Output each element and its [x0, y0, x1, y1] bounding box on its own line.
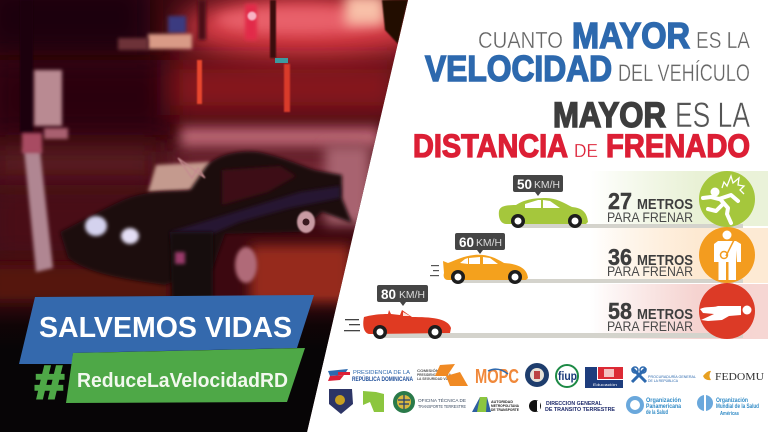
- icon: person lying down: [699, 283, 755, 339]
- row: 50 km/h: [499, 171, 768, 228]
- headline: velocity: [425, 15, 751, 89]
- car: orange: [443, 255, 528, 284]
- logo: Procuraduría: PROCURADURÍA GENERAL: [648, 375, 696, 379]
- headline: velocity: ES LA: [696, 27, 751, 53]
- speed lines: [430, 265, 439, 276]
- headline: velocity: VELOCIDAD: [425, 48, 612, 89]
- logo: Autoridad Metropolitana: METROPOLITANA: [491, 404, 519, 408]
- speed label: KM/H: [399, 290, 425, 301]
- logo: OMS: Américas: [720, 411, 739, 417]
- logo: Comisión: PRESIDENCIAL PARA: [417, 373, 451, 377]
- logo: national seal: [525, 363, 549, 387]
- speed lines: [344, 319, 360, 331]
- row: 60 km/h: [430, 227, 768, 284]
- logo: Autoridad Metropolitana: [472, 397, 519, 412]
- hash symbol: #: [35, 356, 64, 408]
- car: green: [499, 198, 588, 228]
- logo: Oficina Técnica: [393, 391, 466, 413]
- logo: green bird: [363, 391, 384, 412]
- logo: Presidencia: REPÚBLICA DOMINICANA: [352, 376, 414, 383]
- stopping distance text: [607, 298, 693, 334]
- logo: OPS: Organización: [646, 398, 681, 404]
- stopping distance text: PARA FRENAR: [607, 264, 693, 279]
- stopping distance text: METROS: [637, 252, 693, 269]
- logo: Presidencia: [328, 369, 414, 383]
- headline: braking distance: DE: [574, 141, 598, 161]
- logo: shield: [329, 389, 353, 414]
- logo: OPS: de la Salud: [646, 410, 668, 416]
- speed label: [377, 285, 428, 306]
- logo: OPS: [626, 396, 682, 416]
- blue banner with title: [19, 295, 314, 364]
- speed label: KM/H: [534, 180, 560, 191]
- stopping distance text: 27: [608, 188, 632, 214]
- logo: Comisión: LA SEGURIDAD VIAL: [417, 377, 452, 381]
- pole: [20, 42, 34, 132]
- logo: Comisión: [417, 364, 468, 386]
- stopping distance text: [607, 188, 693, 225]
- stopping distance text: PARA FRENAR: [607, 319, 693, 334]
- campaign banner: Salvemos Vidas: [19, 295, 314, 408]
- logo: Autoridad Metropolitana: AUTORIDAD: [491, 400, 513, 404]
- logo: Autoridad Metropolitana: DE TRANSPORTE: [491, 408, 519, 412]
- stopping distance text: METROS: [637, 306, 693, 323]
- logo: Dirección General de Tránsito: [529, 400, 616, 413]
- blue banner with title: SALVEMOS VIDAS: [39, 312, 292, 344]
- logo: Presidencia: PRESIDENCIA DE LA: [353, 370, 411, 376]
- logo: FEDOMU: [703, 371, 765, 383]
- logo: Educación: Educación: [593, 382, 617, 387]
- background shapes: [168, 16, 186, 33]
- headline: braking distance: MAYOR: [553, 96, 666, 135]
- green banner with hashtag: ReduceLaVelocidadRD: [77, 370, 288, 392]
- logo: Oficina Técnica: TRANSPORTE TERRESTRE: [418, 404, 466, 410]
- headline: braking distance: [413, 96, 750, 164]
- logo: Oficina Técnica: OFICINA TÉCNICA DE: [418, 397, 466, 404]
- icon: person falling: [699, 171, 755, 227]
- logo: MOPC: MOPC: [475, 366, 519, 388]
- logo: Comisión: COMISIÓN: [417, 368, 440, 373]
- speed label: [455, 233, 505, 254]
- row: 80 km/h: [344, 283, 768, 339]
- headline: braking distance: DISTANCIA: [413, 128, 568, 164]
- speed label: 60: [459, 234, 474, 250]
- logos strip: [328, 363, 765, 417]
- stopping distance text: 36: [608, 244, 632, 270]
- stopping distance text: METROS: [637, 196, 693, 213]
- stopping distance text: 58: [608, 298, 632, 324]
- logo: OPS: Panamericana: [646, 404, 682, 410]
- headline: velocity: MAYOR: [572, 15, 690, 56]
- logo: fiup: fiup: [558, 369, 577, 383]
- icon: injured person with sling: [699, 227, 755, 283]
- stopping distance text: [607, 244, 693, 279]
- logo: Dirección General de Tránsito: DIRECCION GENERAL: [546, 401, 602, 407]
- logo: fiup: [556, 365, 578, 387]
- headline: velocity: CUANTO: [478, 27, 563, 53]
- car: [60, 152, 352, 285]
- logo: Procuraduría: DE LA REPÚBLICA: [648, 378, 678, 383]
- logo: Dirección General de Tránsito: DE TRANSITO TERRESTRE: [545, 407, 616, 413]
- logo: Procuraduría: [632, 367, 696, 383]
- logo: FEDOMU: FEDOMU: [715, 372, 765, 383]
- stopping distance text: PARA FRENAR: [607, 210, 693, 225]
- speed label: 80: [381, 286, 396, 302]
- headline: braking distance: FRENADO: [606, 128, 750, 164]
- green banner with hashtag: [66, 348, 305, 403]
- logo: Educación: [585, 367, 623, 388]
- logo: OMS: Organización: [716, 398, 748, 404]
- speed label: [513, 175, 563, 196]
- car: red convertible: [363, 310, 451, 339]
- speed label: KM/H: [476, 238, 502, 249]
- photo: crashed car at night: [0, 0, 430, 432]
- logo: OMS: [697, 395, 759, 417]
- speed label: 50: [517, 176, 532, 192]
